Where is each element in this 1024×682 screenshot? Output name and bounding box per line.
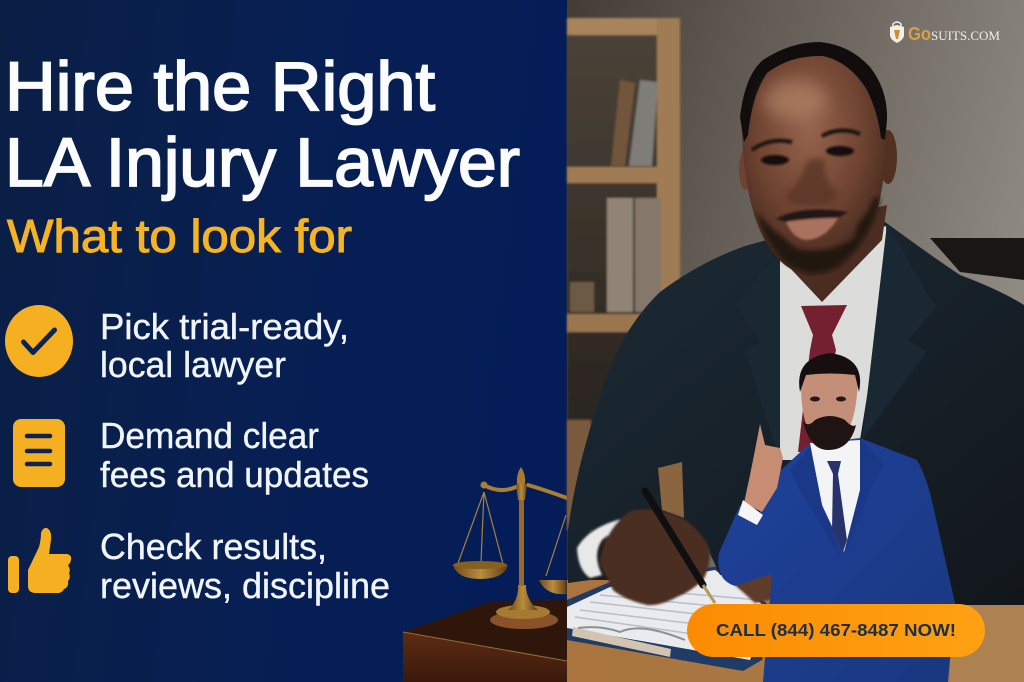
head bbox=[739, 42, 897, 276]
icon: shield lock bbox=[890, 22, 904, 43]
desk bbox=[567, 580, 1024, 682]
call to action button: CALL (844) 467-8487 NOW! bbox=[716, 620, 956, 640]
jacket lapels bbox=[790, 438, 884, 560]
item 2: clear fees bbox=[13, 415, 369, 495]
mouth bbox=[776, 210, 848, 240]
lapels bbox=[736, 224, 936, 462]
logo: gosuits.com bbox=[890, 22, 1000, 44]
wooden pedestal bbox=[403, 600, 567, 682]
icon: document bbox=[13, 419, 65, 487]
text: demand clear fees: fees and updates bbox=[100, 454, 369, 495]
forehead highlight bbox=[763, 80, 827, 120]
title: LA Injury Lawyer bbox=[5, 124, 520, 201]
logo: gosuits.com: SUITS.COM bbox=[931, 28, 1000, 43]
panel: office photo bbox=[567, 0, 1024, 682]
large lawyer bbox=[568, 42, 1024, 605]
patterned tie bbox=[827, 461, 847, 552]
text: check results: Check results, bbox=[100, 526, 327, 567]
shirt cuff bbox=[738, 500, 763, 525]
raised hand bbox=[744, 424, 783, 512]
text: check results: reviews, discipline bbox=[100, 565, 390, 606]
text: check results bbox=[100, 526, 390, 606]
hair bbox=[740, 42, 887, 142]
text: demand clear fees: Demand clear bbox=[100, 415, 319, 456]
icon: thumbs up bbox=[8, 528, 71, 593]
beard bbox=[756, 197, 880, 273]
item 1: trial-ready lawyer bbox=[5, 305, 349, 385]
chair back bbox=[930, 238, 1024, 280]
bookshelf bbox=[567, 18, 680, 595]
eyes and brows bbox=[752, 130, 860, 165]
clipboard and paper bbox=[567, 566, 775, 671]
wood gap behind arm bbox=[658, 462, 684, 518]
text: pick trial-ready bbox=[100, 306, 349, 385]
white shirt bbox=[810, 440, 860, 552]
title bbox=[5, 48, 520, 201]
shirt and collar bbox=[780, 226, 888, 460]
necktie bbox=[798, 305, 847, 452]
icon: check circle bbox=[5, 305, 73, 377]
pen bbox=[645, 491, 715, 603]
title: Hire the Right bbox=[5, 48, 435, 125]
text: pick trial-ready: Pick trial-ready, bbox=[100, 306, 349, 347]
writing hand and cuff bbox=[577, 510, 778, 605]
text: demand clear fees bbox=[100, 415, 369, 495]
head bbox=[799, 353, 860, 450]
icon: brass scales bbox=[453, 467, 567, 629]
logo: gosuits.com: Go bbox=[908, 24, 931, 44]
neck bbox=[770, 205, 887, 302]
subtitle: What to look for bbox=[7, 210, 352, 262]
nose bbox=[785, 158, 838, 206]
item 3: check results bbox=[8, 526, 390, 606]
blue jacket bbox=[718, 438, 955, 682]
panel: navy text panel bbox=[0, 0, 567, 682]
jacket bbox=[568, 222, 1024, 605]
call to action button bbox=[687, 604, 985, 657]
text: pick trial-ready: local lawyer bbox=[100, 344, 286, 385]
small lawyer in blue suit bbox=[718, 353, 955, 682]
